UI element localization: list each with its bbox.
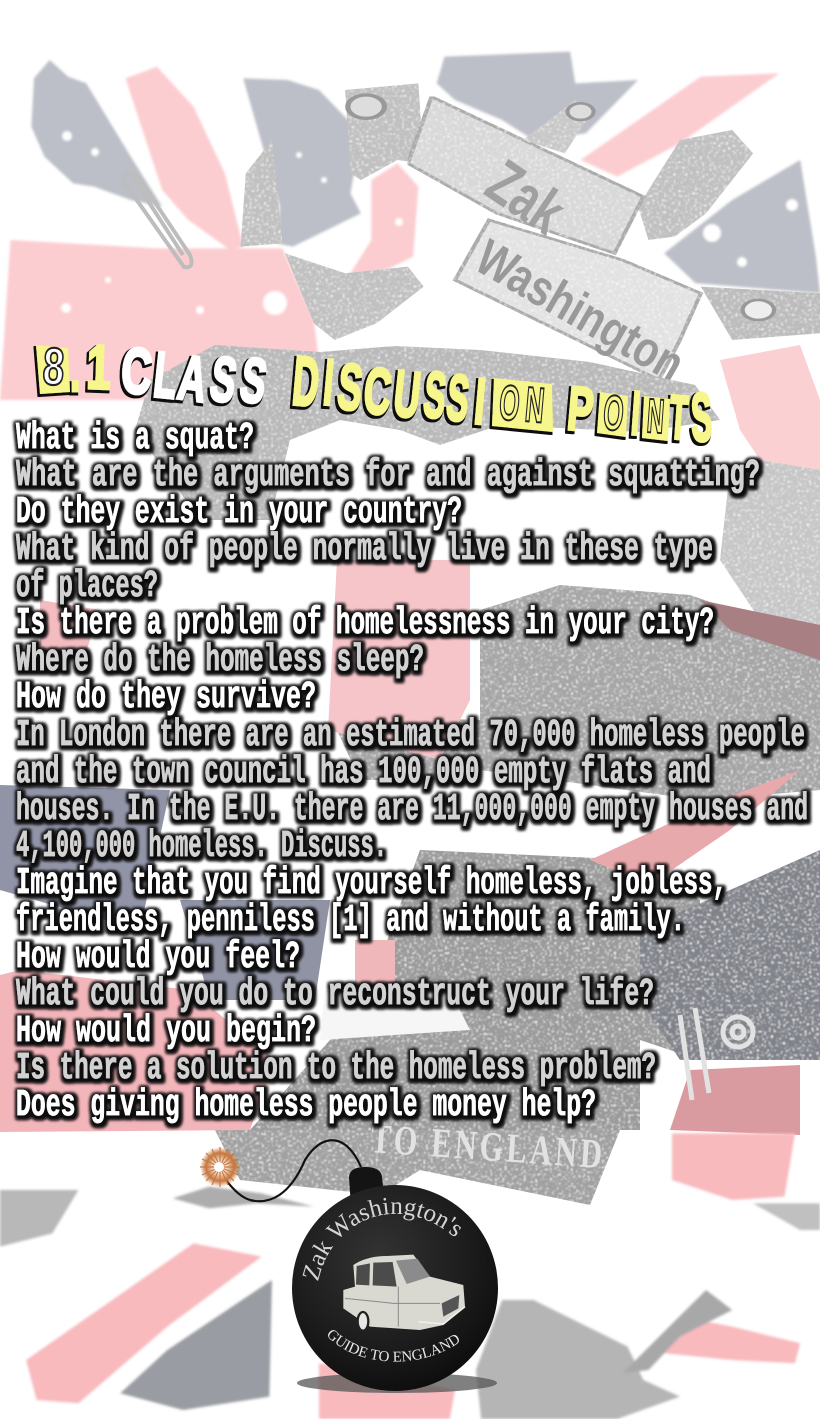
bomb ground shadow (297, 1373, 497, 1393)
discussion questions text block: How would you feel? (16, 936, 300, 979)
car wheel (358, 1312, 368, 1331)
title: class: C (119, 334, 154, 408)
title: discussion: I (472, 366, 488, 439)
background: lower sign lettering: TO ENGLAND (369, 1114, 607, 1178)
title: class (119, 334, 271, 417)
car windows (356, 1259, 430, 1287)
background: washington word: Washington (466, 229, 694, 393)
car bumper (418, 1307, 465, 1324)
bomb fuse (226, 1140, 361, 1201)
car trim line (345, 1287, 440, 1327)
title: discussion: C (360, 355, 395, 429)
title: discussion: O (497, 375, 522, 432)
background: pink strips in the middle (0, 345, 820, 1135)
background: lower clip detail (680, 1008, 753, 1100)
background: upper flag section (0, 52, 820, 400)
discussion questions text block: of places? (16, 565, 158, 608)
car grille (442, 1295, 459, 1317)
bomb logo (200, 1139, 498, 1393)
title: 8.1: 1 (86, 334, 112, 403)
title: discussion (290, 341, 553, 439)
title: points: P (565, 373, 596, 444)
title: discussion: N (523, 377, 547, 434)
title: class: A (174, 343, 211, 416)
discussion questions text block: 4,100,000 homeless. Discuss. (16, 825, 387, 868)
car illustration (343, 1255, 465, 1331)
title: points: N (645, 390, 666, 445)
background: lower flag section (0, 1133, 820, 1419)
title: points: O (601, 385, 626, 442)
background: star glints (61, 131, 798, 315)
background: zak sign (408, 97, 820, 380)
title: points: S (690, 380, 713, 456)
bomb guide text: GUIDE TO ENGLAND (328, 1330, 459, 1362)
title: discussion: I (321, 347, 336, 420)
background: central gritty section (135, 345, 820, 1205)
background: upper gritty gray scraps (241, 83, 753, 340)
title: discussion: S (444, 361, 472, 435)
title: class: L (150, 339, 181, 413)
title: class: S (236, 343, 271, 417)
title: points: T (667, 383, 690, 453)
title: points: I (629, 380, 642, 448)
title: discussion: S (334, 350, 366, 425)
background: sign clips (348, 95, 774, 320)
title: discussion: U (390, 357, 424, 432)
title: 8.1: 8 (41, 336, 66, 397)
title: points (565, 373, 713, 456)
bomb neck (349, 1167, 385, 1211)
title: 8.1: . (70, 335, 80, 404)
discussion questions text block: How would you begin? (16, 1010, 316, 1053)
title: 8.1 (36, 334, 112, 404)
title: discussion: D (290, 341, 322, 421)
car body (343, 1255, 465, 1330)
title (36, 334, 713, 456)
background: zak word: Zak (474, 146, 578, 248)
background: safety pin (122, 170, 192, 267)
title: class: S (206, 342, 241, 416)
fuse spark (200, 1147, 240, 1187)
discussion questions text block: What is a squat? (16, 417, 254, 460)
title: discussion: S (421, 358, 449, 432)
discussion questions text block: How do they survive? (16, 676, 316, 719)
discussion questions text block: Where do the homeless sleep? (16, 639, 424, 682)
discussion questions text block: Do they exist in your country? (16, 491, 462, 534)
bomb body (292, 1185, 498, 1391)
discussion questions text block (16, 417, 808, 1127)
bomb title text: Zak Washington's (302, 1198, 461, 1281)
